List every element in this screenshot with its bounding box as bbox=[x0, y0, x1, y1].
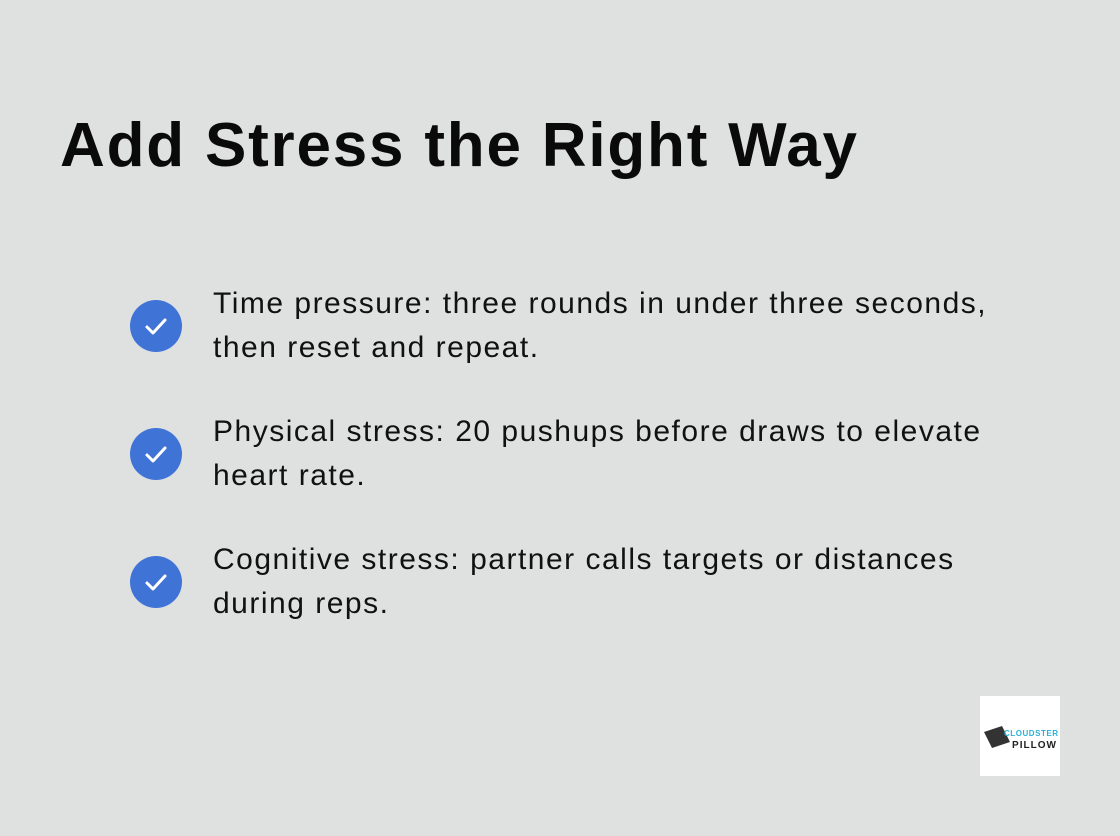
logo: CLOUDSTER bbox=[1004, 729, 1058, 738]
logo bbox=[980, 696, 1060, 776]
text: physical stress bbox=[213, 415, 982, 492]
text: cognitive stress bbox=[213, 543, 955, 620]
text: time pressure: then reset and repeat. bbox=[213, 331, 540, 364]
text: time pressure bbox=[213, 287, 987, 364]
item: physical stress bbox=[130, 415, 982, 492]
text: cognitive stress: during reps. bbox=[213, 587, 389, 620]
logo: PILLOW bbox=[1012, 740, 1057, 751]
icon: check bbox=[130, 300, 182, 352]
item: cognitive stress bbox=[130, 543, 955, 620]
item: time pressure bbox=[130, 287, 987, 364]
text: cognitive stress: Cognitive stress: partner calls targets or distances bbox=[213, 543, 955, 576]
text: physical stress: heart rate. bbox=[213, 459, 366, 492]
text: time pressure: Time pressure: three rounds in under three seconds, bbox=[213, 287, 987, 320]
icon: check bbox=[130, 556, 182, 608]
title: Add Stress the Right Way bbox=[60, 111, 859, 180]
icon: check bbox=[130, 428, 182, 480]
text: physical stress: Physical stress: 20 pushups before draws to elevate bbox=[213, 415, 982, 448]
